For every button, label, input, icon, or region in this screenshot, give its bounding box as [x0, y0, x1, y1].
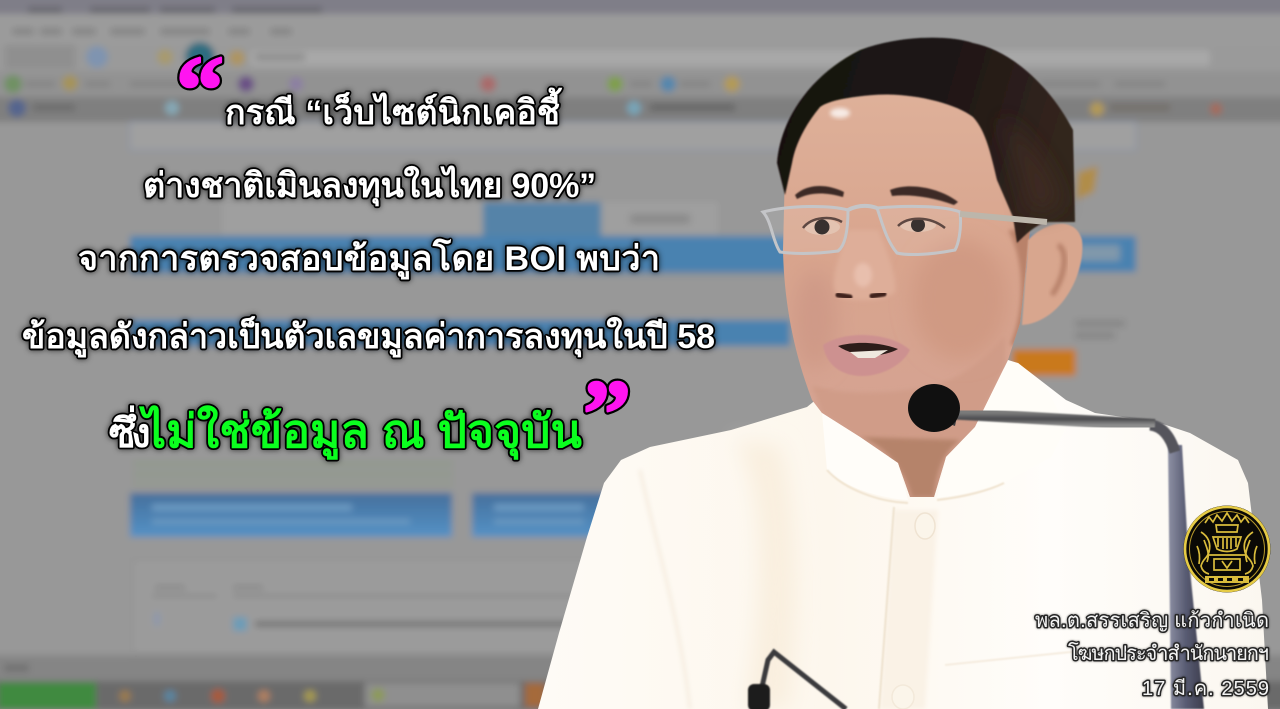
quote text: ข้อมูลดังกล่าวเป็นตัวเลขมูลค่าการลงทุนในปี 58 [22, 315, 715, 358]
microphone: lower left [748, 652, 846, 709]
quote text: จากการตรวจสอบข้อมูลโดย BOI พบว่า [78, 238, 660, 280]
eyes [804, 219, 840, 235]
collar [822, 413, 908, 500]
glasses [763, 206, 1047, 255]
neck and face [783, 70, 1030, 497]
caption: speaker name, role and date [1035, 610, 1269, 700]
person: spokesman at microphones [538, 38, 1268, 709]
quote text: กรณี “เว็บไซต์นิกเคอิชี้ [225, 87, 562, 132]
closing quotation mark: ” [583, 360, 631, 467]
quote text: ซึ่ง [109, 405, 151, 456]
quote text: ต่างชาติเมินลงทุนในไทย 90%” [143, 165, 596, 207]
jacket [538, 363, 1268, 709]
eyebrows [795, 186, 958, 205]
facial shading, clipped to the face [793, 230, 1035, 497]
caption: speaker name, role and date: 17 มี.ค. 2559 [1142, 678, 1269, 700]
quote text [22, 87, 715, 460]
forehead highlight [830, 108, 850, 118]
closing quotation mark: ” [583, 360, 631, 467]
jacket shading [735, 440, 797, 709]
button [915, 513, 935, 539]
hair [777, 38, 1075, 243]
quote text: ไม่ใช่ข้อมูล ณ ปัจจุบัน [138, 404, 583, 460]
opening quotation mark: “ [176, 36, 224, 143]
mouth [823, 335, 910, 376]
opening quotation mark: “ [176, 36, 224, 143]
microphone: main gooseneck [908, 384, 1204, 709]
nose [834, 230, 895, 300]
caption: speaker name, role and date: พล.ต.สรรเสริญ แก้วกำเนิด [1035, 610, 1269, 632]
emblem: Thai government seal [1184, 506, 1270, 592]
caption: speaker name, role and date: โฆษกประจำสำนักนายกฯ [1068, 642, 1269, 665]
ear [1022, 224, 1082, 325]
